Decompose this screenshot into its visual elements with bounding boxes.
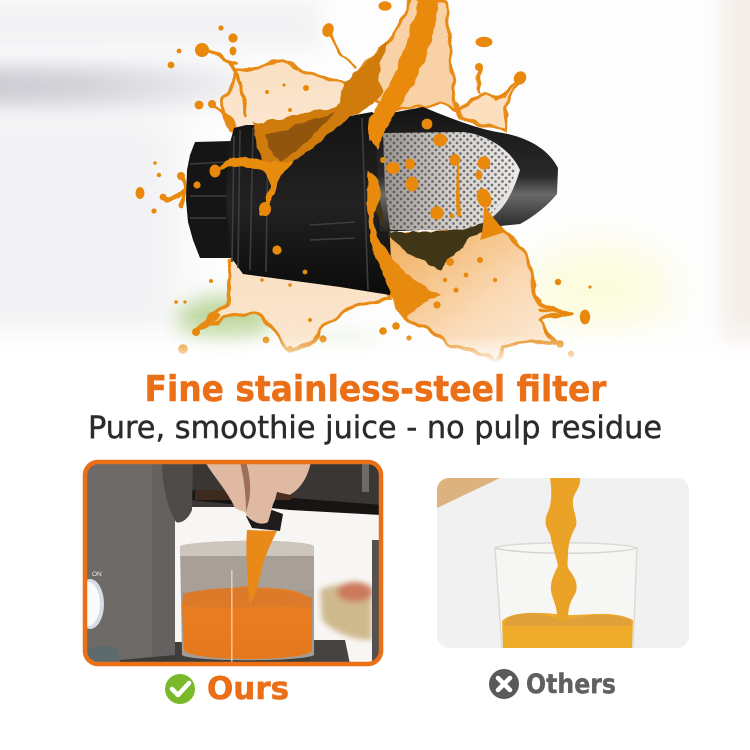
- splash: lower right: [376, 226, 572, 362]
- label: others: [489, 669, 616, 700]
- panel: others photo: [437, 478, 689, 648]
- label: ours: [165, 671, 289, 707]
- juice: droplets: [136, 1, 592, 357]
- splash: top stream: [352, 0, 457, 110]
- splash: upper right: [458, 76, 522, 130]
- ours: hand: [205, 462, 311, 524]
- juice: arm running over body: [216, 157, 294, 216]
- juice: dark wash on body top: [253, 40, 388, 163]
- others: pulpy stream: [546, 478, 580, 621]
- ours: on label: ON: [92, 571, 102, 578]
- filter: stainless mesh: [383, 132, 520, 230]
- title: Fine stainless-steel filter: [144, 369, 607, 410]
- juice: lower stream over filter: [368, 172, 500, 270]
- filter: ribbed end cap: [186, 141, 232, 258]
- ours: orange frame: [85, 462, 381, 664]
- ours: spout: [246, 510, 283, 531]
- others text: Others: [526, 669, 616, 700]
- filter: conical black body: [226, 112, 392, 295]
- others: glass: [495, 543, 637, 648]
- splash: upper left: [222, 60, 345, 130]
- juice stream over filter: [216, 0, 500, 320]
- subtitle: Pure, smoothie juice - no pulp residue: [88, 410, 662, 446]
- icon: green check: [165, 674, 195, 704]
- ours: jug: [180, 541, 314, 660]
- ours: juice in jug: [182, 586, 312, 659]
- splash: lower left: [194, 258, 392, 351]
- ours text: Ours: [207, 671, 289, 707]
- filter: spout nozzle: [375, 107, 558, 232]
- juice: main diagonal stream: [368, 0, 438, 150]
- others: wood board: [437, 478, 500, 508]
- ours: juicer housing: [87, 464, 152, 660]
- ours: top chamber: [190, 462, 382, 507]
- ours: blurred bowl: [320, 582, 373, 640]
- filter: rib highlights: [190, 118, 368, 290]
- juice: lower diagonal stream: [367, 172, 440, 320]
- bottom fade of hero image: [0, 335, 750, 365]
- background photo wash: [0, 0, 750, 370]
- splash arm: left upper tendrils: [165, 35, 572, 333]
- juice splash behind filter: [165, 0, 572, 362]
- ours: counter base: [175, 642, 310, 662]
- filter assembly: [186, 107, 558, 295]
- ours: right post: [372, 540, 379, 661]
- panel: ours photo: [76, 462, 382, 664]
- juice: dark patch on body top: [265, 112, 335, 162]
- ours: pouring stream: [246, 530, 277, 604]
- ours: knob: [87, 579, 104, 629]
- others: juice in glass: [502, 613, 633, 648]
- icon: grey cross: [489, 669, 519, 699]
